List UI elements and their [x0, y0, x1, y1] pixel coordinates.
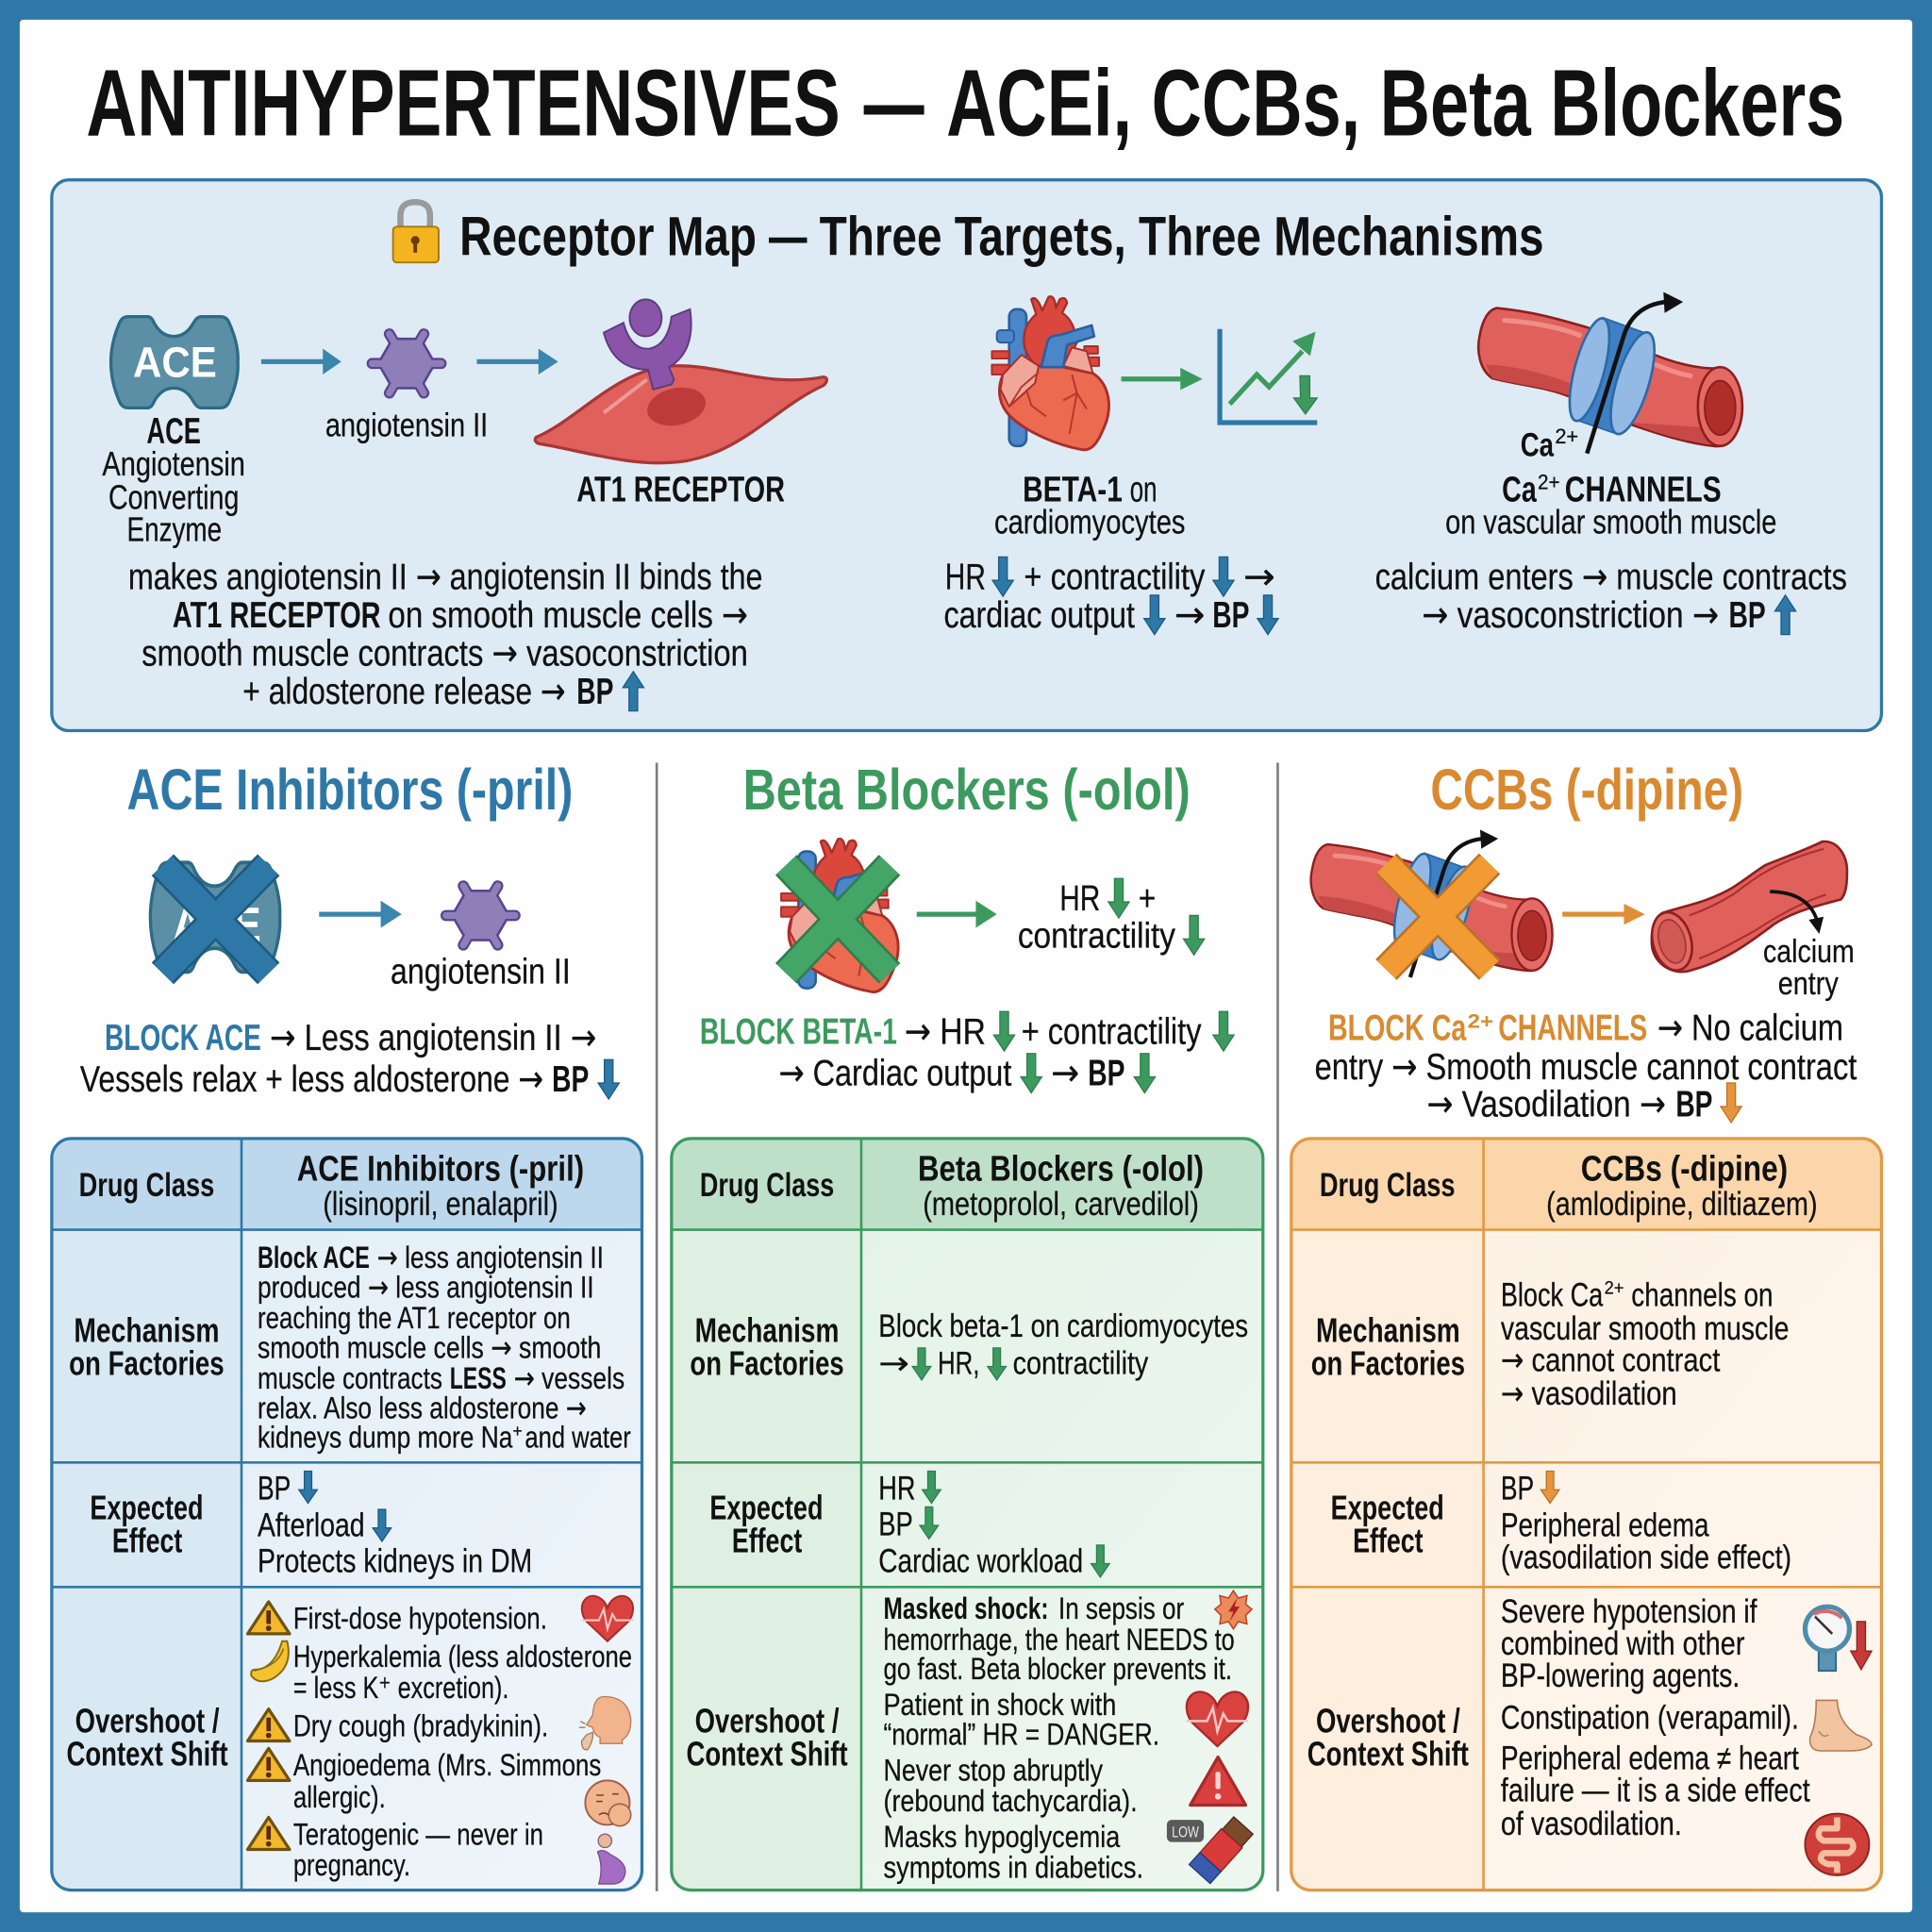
- row: expected effect: Expected: [709, 1488, 823, 1526]
- row: overshoot: pregnancy.: [293, 1847, 410, 1882]
- row: expected effect: [90, 1471, 532, 1580]
- text: calcium pathway: [1375, 556, 1847, 637]
- row: mechanism: +: [512, 1421, 523, 1441]
- row: drug class: Drug Class: [1320, 1167, 1456, 1204]
- text: ACE block pathway: [80, 1017, 619, 1101]
- icon: angiotensin II: [372, 334, 441, 393]
- panel heading: —: [769, 206, 808, 267]
- label: Ca2+ ion: [1521, 425, 1578, 463]
- row: expected effect: [709, 1471, 1109, 1580]
- row: mechanism: kidneys dump more Na: [258, 1420, 513, 1455]
- label: angiotensin II: angiotensin II: [391, 952, 571, 991]
- icon: low sugar chocolate bar: [1167, 1816, 1254, 1884]
- heading: CCBs: CCBs (-dipine): [1430, 758, 1743, 823]
- icon: blocked heart: [781, 839, 898, 992]
- row: mechanism: → less angiotensin II: [377, 1240, 604, 1275]
- icon: heart: [991, 296, 1108, 450]
- row: overshoot: Never stop abruptly: [883, 1752, 1104, 1787]
- label: calcium entry: entry: [1778, 966, 1839, 1002]
- text: CCB block pathway: 2+: [1468, 1010, 1493, 1032]
- panel: CCBs: [1291, 758, 1881, 1890]
- label: beta-1: on: [1130, 471, 1157, 510]
- row: mechanism: HR,: [938, 1345, 979, 1381]
- row: expected effect: Effect: [732, 1522, 802, 1560]
- row: mechanism: on Factories: [69, 1344, 225, 1383]
- heading: ACE inhibitors: ACE Inhibitors (-pril): [127, 758, 573, 823]
- row: mechanism: [69, 1240, 631, 1455]
- table: beta blockers: [672, 1139, 1263, 1890]
- text: AT1 pathway: [128, 556, 762, 713]
- row: overshoot: = less K⁺ excretion).: [293, 1670, 508, 1705]
- row: drug class: Beta Blockers (-olol): [918, 1149, 1204, 1189]
- panel heading: Receptor Map: [459, 206, 757, 267]
- row: mechanism: → vasodilation: [1501, 1374, 1677, 1413]
- icon: heart with ECG: [1187, 1691, 1248, 1746]
- row: drug class: Drug Class: [79, 1167, 214, 1204]
- row: mechanism: Mechanism: [1316, 1310, 1460, 1349]
- row: mechanism: → cannot contract: [1501, 1341, 1721, 1380]
- label: ACE: Converting: [108, 477, 239, 516]
- label: Ca2+ channels: Ca: [1502, 471, 1537, 510]
- label: Ca2+ channels: CHANNELS: [1565, 471, 1722, 510]
- text: calcium pathway: BP: [1728, 595, 1766, 636]
- label: ACE: ACE: [146, 411, 201, 452]
- icons: warning triangles: [248, 1602, 290, 1849]
- icon: coughing head: [579, 1697, 631, 1750]
- text: beta block pathway: + contractility: [1022, 1011, 1202, 1052]
- text: calcium pathway: calcium enters → muscle contracts: [1375, 556, 1847, 598]
- arrow: ACE to angiotensin II: [261, 349, 341, 375]
- row: overshoot: Masks hypoglycemia: [883, 1819, 1121, 1854]
- row: mechanism: Block beta-1 on cardiomyocytes: [878, 1308, 1248, 1344]
- row: mechanism: muscle contracts: [258, 1360, 442, 1395]
- row: expected effect: Afterload: [258, 1507, 365, 1544]
- icon: blocked ACE: ACE: [173, 898, 261, 953]
- row: expected effect: HR: [878, 1471, 915, 1507]
- row: drug class: CCBs (-dipine): [1581, 1149, 1788, 1189]
- label: Ca2+ channels: [1445, 471, 1776, 541]
- row: overshoot: “normal” HR = DANGER.: [883, 1716, 1159, 1751]
- arrow: heart to graph: [1122, 368, 1203, 390]
- row: overshoot: of vasodilation.: [1501, 1806, 1682, 1842]
- text: ACE block pathway: BLOCK ACE: [105, 1018, 261, 1058]
- row: expected effect: Protects kidneys in DM: [258, 1543, 532, 1580]
- row: drug class: [79, 1149, 584, 1223]
- row: drug class: (lisinopril, enalapril): [323, 1186, 558, 1223]
- label: calcium entry: calcium: [1763, 934, 1855, 970]
- row: expected effect: Effect: [1353, 1522, 1424, 1560]
- row: overshoot: symptoms in diabetics.: [883, 1850, 1143, 1885]
- row: drug class: Drug Class: [700, 1167, 834, 1204]
- row: mechanism: vascular smooth muscle: [1501, 1310, 1789, 1347]
- row: overshoot: Hyperkalemia (less aldosterone: [293, 1639, 632, 1674]
- label: beta-1: BETA-1: [1023, 471, 1123, 510]
- text: AT1 pathway: smooth muscle contracts → vasoconstriction: [142, 632, 748, 675]
- panel: ACE inhibitors: [52, 758, 641, 1890]
- row: drug class: ACE Inhibitors (-pril): [297, 1149, 584, 1189]
- title: ANTIHYPERTENSIVES: [86, 51, 841, 157]
- text: effect: contractility: [1018, 916, 1175, 956]
- text: CCB block pathway: [1315, 1007, 1857, 1125]
- text: ACE block pathway: Vessels relax + less aldosterone →: [80, 1058, 543, 1101]
- icon: blocked calcium channel: [1311, 829, 1552, 977]
- row: mechanism: 2+: [1605, 1277, 1624, 1298]
- icon: intestines: [1805, 1814, 1869, 1875]
- label: angiotensin II: angiotensin II: [325, 407, 488, 443]
- text: beta-1 pathway: HR: [945, 557, 986, 597]
- icon: heart with ECG: [581, 1596, 633, 1641]
- text: beta block pathway: [700, 1010, 1234, 1095]
- icon: banana: [251, 1641, 289, 1681]
- row: overshoot: allergic).: [293, 1779, 386, 1814]
- heading: beta blockers: Beta Blockers (-olol): [743, 758, 1191, 823]
- icon: blocked ACE: [150, 862, 280, 974]
- arrow: block to dilation: [1562, 904, 1645, 924]
- panel heading: Three Targets, Three Mechanisms: [820, 206, 1544, 267]
- row: overshoot: Context Shift: [67, 1735, 228, 1774]
- title: [86, 51, 1844, 157]
- row: mechanism: reaching the AT1 receptor on: [258, 1300, 571, 1335]
- row: overshoot: [67, 1601, 632, 1882]
- text: beta block pathway: BP: [1088, 1054, 1124, 1094]
- row: drug class: [1320, 1149, 1818, 1223]
- text: beta block pathway: → HR: [905, 1010, 986, 1053]
- row: overshoot: hemorrhage, the heart NEEDS to: [883, 1622, 1235, 1657]
- text: CCB block pathway: BP: [1675, 1084, 1713, 1124]
- row: mechanism: → vessels: [514, 1360, 625, 1396]
- icon: swollen face: [585, 1780, 631, 1826]
- text: CCB block pathway: → Vasodilation →: [1426, 1083, 1666, 1125]
- row: expected effect: Effect: [112, 1522, 182, 1560]
- panel: beta blockers: [672, 758, 1263, 1890]
- label: Ca2+ channels: 2+: [1538, 471, 1560, 494]
- row: mechanism: LESS: [450, 1360, 507, 1395]
- text: ACE block pathway: → Less angiotensin II →: [270, 1017, 596, 1059]
- icon: red warning: [1191, 1757, 1245, 1805]
- text: beta-1 pathway: cardiac output: [943, 595, 1135, 636]
- row: expected effect: (vasodilation side effect): [1501, 1540, 1791, 1576]
- text: effect: +: [1139, 879, 1156, 919]
- row: mechanism: [690, 1308, 1248, 1383]
- text: CCB block pathway: → No calcium: [1657, 1007, 1843, 1049]
- row: mechanism: Block Ca: [1501, 1276, 1604, 1313]
- text: AT1 pathway: BP: [576, 672, 613, 712]
- row: overshoot: Dry cough (bradykinin).: [293, 1707, 548, 1742]
- row: expected effect: BP: [878, 1506, 913, 1542]
- icon: swollen foot: [1810, 1700, 1872, 1751]
- row: overshoot: Severe hypotension if: [1501, 1593, 1757, 1630]
- row: drug class: [700, 1149, 1204, 1223]
- row: expected effect: BP: [1501, 1471, 1534, 1507]
- row: mechanism: produced → less angiotensin II: [258, 1269, 594, 1305]
- row: overshoot: Overshoot /: [1316, 1701, 1460, 1740]
- icon: shock burst: [1215, 1591, 1252, 1629]
- text: beta block pathway: → Cardiac output: [778, 1053, 1011, 1095]
- icon: falling output graph: [1220, 329, 1317, 423]
- text: beta-1 pathway: →: [1174, 594, 1205, 637]
- row: overshoot: (rebound tachycardia).: [883, 1783, 1138, 1818]
- icon: BP gauge with down arrow: [1805, 1607, 1872, 1671]
- row: overshoot: [1307, 1593, 1810, 1842]
- text: beta-1 pathway: →: [1243, 556, 1275, 598]
- row: drug class: (metoprolol, carvedilol): [923, 1186, 1199, 1223]
- icon: padlock: [393, 202, 439, 262]
- label: calcium entry: [1763, 934, 1855, 1002]
- text: AT1 pathway: + aldosterone release →: [242, 671, 566, 713]
- row: overshoot: Peripheral edema ≠ heart: [1501, 1740, 1799, 1777]
- row: mechanism: contractility: [1013, 1345, 1148, 1381]
- row: overshoot: BP-lowering agents.: [1501, 1657, 1740, 1694]
- panel heading: [459, 206, 1544, 267]
- row: expected effect: Expected: [1331, 1488, 1444, 1526]
- column dividers: [657, 762, 1277, 1891]
- row: mechanism: on Factories: [1311, 1344, 1465, 1383]
- icon: vessel with calcium channel: [1478, 292, 1742, 454]
- text: ACE block pathway: BP: [552, 1059, 589, 1100]
- row: mechanism: Block ACE: [258, 1240, 370, 1274]
- arrow: angiotensin II to receptor: [476, 349, 558, 375]
- label: ACE: Enzyme: [127, 509, 222, 548]
- text: effect: HR: [1059, 879, 1100, 919]
- table: ACE inhibitors: [52, 1139, 641, 1890]
- row: overshoot: Patient in shock with: [883, 1687, 1116, 1722]
- text: CCB block pathway: CHANNELS: [1498, 1008, 1647, 1048]
- icon: low sugar chocolate bar: LOW: [1172, 1823, 1199, 1840]
- icon: ACE enzyme: ACE: [133, 339, 217, 387]
- row: mechanism: [1311, 1276, 1789, 1413]
- icon: dilated vessel: [1646, 841, 1847, 974]
- row: mechanism: Mechanism: [74, 1310, 219, 1349]
- row: expected effect: BP: [258, 1471, 291, 1507]
- row: overshoot: First-dose hypotension.: [293, 1601, 547, 1636]
- label: ACE: Angiotensin: [102, 444, 245, 483]
- text: CCB block pathway: BLOCK Ca: [1328, 1008, 1467, 1048]
- row: overshoot: Teratogenic — never in: [293, 1816, 543, 1851]
- row: mechanism: and water: [525, 1420, 631, 1455]
- row: overshoot: Context Shift: [1307, 1735, 1469, 1774]
- arrow: ACE block to angiotensin: [319, 901, 402, 928]
- label: beta-1: cardiomyocytes: [994, 503, 1185, 541]
- text: beta-1 pathway: + contractility: [1024, 557, 1206, 597]
- row: mechanism: Mechanism: [695, 1310, 839, 1349]
- text: beta-1 pathway: BP: [1212, 595, 1249, 636]
- label: ACE: [102, 411, 245, 548]
- row: mechanism: relax. Also less aldosterone →: [258, 1390, 587, 1425]
- text: AT1 pathway: on smooth muscle cells →: [388, 594, 748, 637]
- row: expected effect: Peripheral edema: [1501, 1507, 1709, 1544]
- row: mechanism: →: [878, 1344, 909, 1382]
- row: overshoot: Overshoot /: [75, 1701, 219, 1740]
- text: beta block pathway: →: [1051, 1053, 1079, 1095]
- icon: ACE enzyme: [111, 317, 238, 408]
- table: CCBs: [1291, 1139, 1881, 1890]
- row: overshoot: [687, 1591, 1235, 1885]
- row: overshoot: go fast. Beta blocker prevents it.: [883, 1651, 1232, 1686]
- text: CCB block pathway: entry → Smooth muscle cannot contract: [1315, 1046, 1857, 1089]
- row: overshoot: Constipation (verapamil).: [1501, 1699, 1799, 1736]
- row: overshoot: Context Shift: [687, 1735, 848, 1774]
- text: beta block pathway: BLOCK BETA-1: [700, 1011, 897, 1052]
- row: overshoot: Masked shock:: [883, 1591, 1049, 1625]
- row: overshoot: Angioedema (Mrs. Simmons: [293, 1747, 601, 1782]
- icon: smooth muscle cell with AT1 receptor: [535, 299, 826, 463]
- label: Ca2+ ion: Ca: [1521, 426, 1554, 463]
- arrow: heart to effect: [917, 901, 997, 928]
- label: Ca2+ channels: on vascular smooth muscle: [1445, 503, 1776, 541]
- label: beta-1: [994, 471, 1185, 541]
- row: mechanism: channels on: [1631, 1276, 1774, 1313]
- row: overshoot: failure — it is a side effect: [1501, 1773, 1810, 1809]
- text: beta-1 pathway: [943, 556, 1278, 637]
- row: expected effect: Cardiac workload: [878, 1543, 1083, 1580]
- label: Ca2+ ion: 2+: [1555, 425, 1578, 448]
- icon: angiotensin II small: [446, 886, 515, 945]
- row: expected effect: Expected: [90, 1488, 204, 1526]
- row: drug class: (amlodipine, diltiazem): [1546, 1186, 1818, 1223]
- row: overshoot: In sepsis or: [1058, 1591, 1184, 1625]
- label: AT1 receptor: AT1 RECEPTOR: [576, 471, 785, 510]
- row: mechanism: on Factories: [690, 1344, 844, 1383]
- text: calcium pathway: → vasoconstriction →: [1422, 594, 1719, 637]
- text: AT1 pathway: AT1 RECEPTOR: [173, 595, 381, 636]
- title: —: [864, 51, 924, 157]
- row: expected effect: [1331, 1471, 1791, 1576]
- text: AT1 pathway: makes angiotensin II → angiotensin II binds the: [128, 556, 762, 598]
- icon: pregnant figure: [597, 1834, 625, 1884]
- row: overshoot: combined with other: [1501, 1625, 1745, 1662]
- row: mechanism: smooth muscle cells → smooth: [258, 1329, 601, 1365]
- panel: receptor map: [52, 180, 1881, 731]
- row: overshoot: Overshoot /: [695, 1701, 839, 1740]
- text: effect: [1018, 878, 1205, 956]
